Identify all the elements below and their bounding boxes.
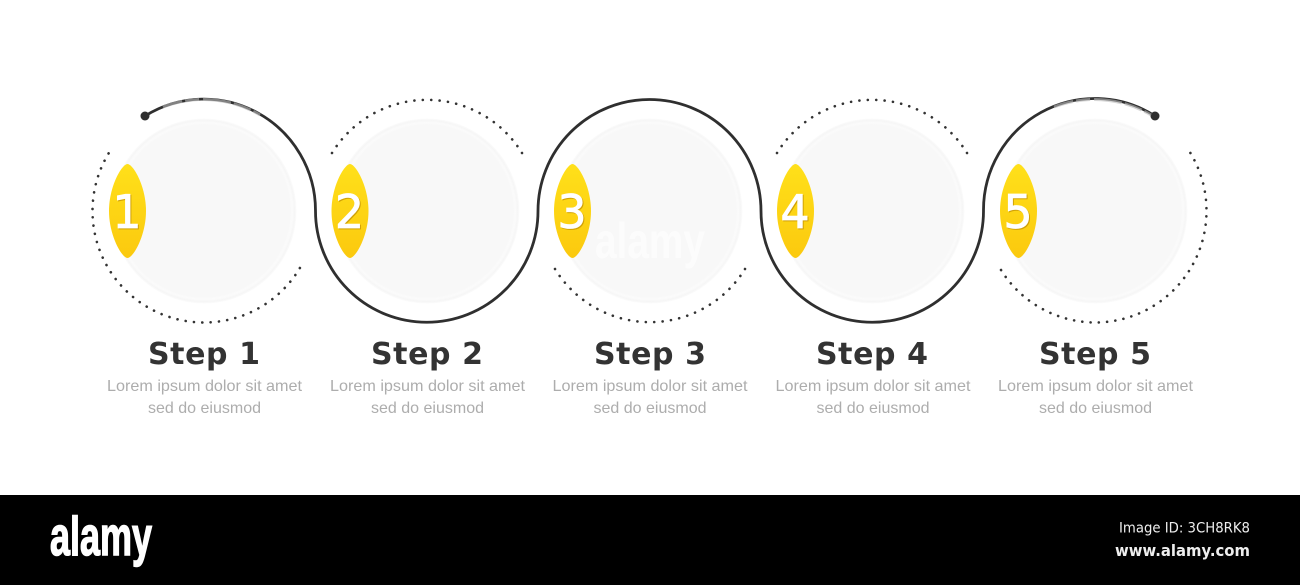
step 3 text: Lorem ipsum dolor sit amet xyxy=(552,378,748,395)
winding connector line xyxy=(145,98,1155,322)
step 5 text: Step 5 xyxy=(1039,337,1151,372)
step 4 text: sed do eiusmod xyxy=(816,400,930,417)
step 5 text: sed do eiusmod xyxy=(1039,400,1152,417)
step 4 text xyxy=(776,337,971,417)
badge 4 xyxy=(777,164,814,258)
panel: step 2 disc xyxy=(334,118,520,304)
step 1 text xyxy=(107,337,303,417)
step 2 text: sed do eiusmod xyxy=(371,400,484,417)
footer bar xyxy=(0,495,1300,585)
badge 5: 5 xyxy=(1003,185,1033,239)
step 4 text: Step 4 xyxy=(816,337,928,372)
dotted arc: step 1 xyxy=(92,153,300,322)
step 4 text: Lorem ipsum dolor sit amet xyxy=(776,378,971,395)
dotted arc: step 3 xyxy=(555,269,745,322)
badge 2: 2 xyxy=(335,185,364,239)
step 3 text xyxy=(552,337,748,417)
dotted arc: step 2 xyxy=(332,100,522,153)
panel: step 5 disc xyxy=(1002,118,1188,304)
badge 4: 4 xyxy=(780,185,810,239)
watermark tint on connector, step 5 xyxy=(1054,99,1151,115)
step 2 text xyxy=(330,337,526,417)
badge 1: 1 xyxy=(112,185,142,239)
panel: step 4 disc xyxy=(780,118,964,304)
badge 3: 3 xyxy=(557,185,587,239)
image id: Image ID: 3CH8RK8 xyxy=(1119,520,1250,536)
footer logo: alamy xyxy=(50,505,152,567)
dotted arc: step 4 xyxy=(777,100,967,153)
watermark tint on connector, step 1 xyxy=(163,99,260,115)
panel: step 1 disc xyxy=(112,118,296,304)
step 1 text: sed do eiusmod xyxy=(148,400,261,417)
step 3 text: sed do eiusmod xyxy=(594,400,706,417)
step 5 text: Lorem ipsum dolor sit amet xyxy=(998,378,1194,395)
badge 3 xyxy=(554,164,591,258)
step 2 text: Lorem ipsum dolor sit amet xyxy=(330,378,526,395)
badge 5 xyxy=(1000,164,1037,258)
connector end dot xyxy=(1150,112,1160,120)
panel: step 3 disc xyxy=(558,118,742,304)
step 1 text: Lorem ipsum dolor sit amet xyxy=(107,378,303,395)
step 1 text: Step 1 xyxy=(148,337,260,372)
badge 1 xyxy=(109,164,146,258)
connector start dot xyxy=(140,112,150,120)
step 2 text: Step 2 xyxy=(371,337,483,372)
step 3 text: Step 3 xyxy=(594,337,706,372)
badge 2 xyxy=(332,164,368,258)
watermark on step 3 disc: alamy xyxy=(595,213,705,269)
website: www.alamy.com xyxy=(1115,541,1250,560)
dotted arc: step 5 xyxy=(1001,153,1207,322)
step 5 text xyxy=(998,337,1194,417)
